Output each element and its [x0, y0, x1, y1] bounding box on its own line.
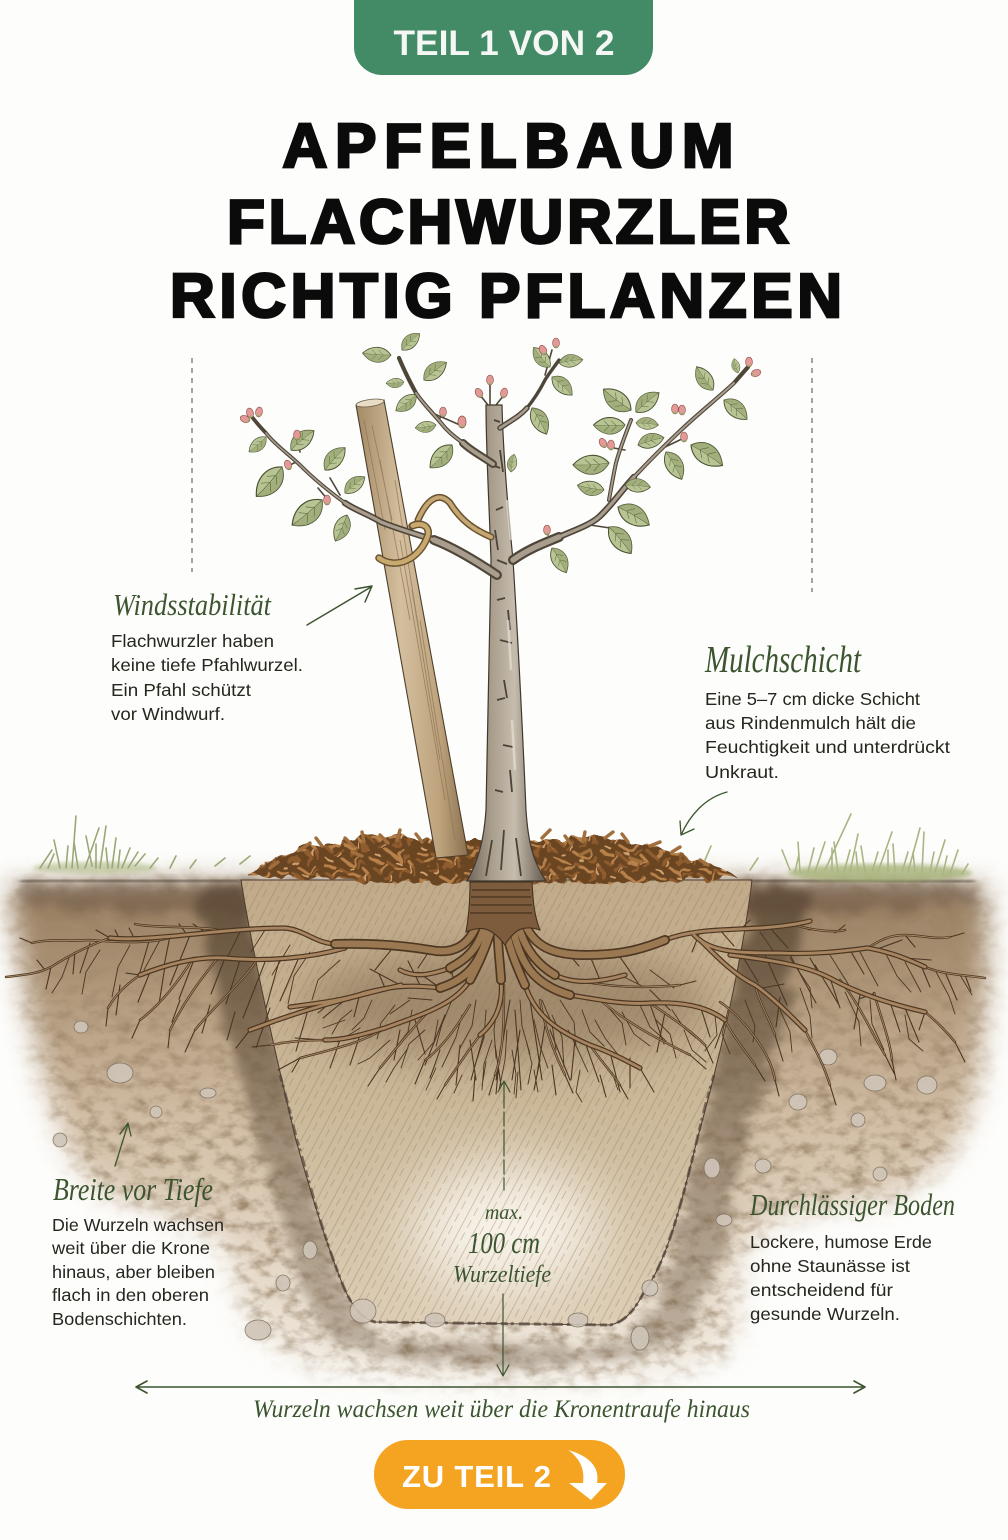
callout: Durchlässiger Boden: entscheidend für — [750, 1280, 893, 1300]
callout: Windsstabilität — [111, 587, 303, 724]
dark band around hole — [195, 888, 812, 1365]
badge: Teil 1 von 2: TEIL 1 VON 2 — [394, 24, 614, 63]
hatching — [241, 880, 752, 1325]
badge: Teil 1 von 2 — [354, 0, 653, 75]
arrow: breadth — [115, 1123, 131, 1166]
roots — [6, 882, 985, 1105]
width arrow — [136, 1381, 865, 1393]
rough hole edge — [280, 1075, 714, 1325]
grass base patches — [33, 862, 157, 874]
icon: down arrow — [568, 1450, 607, 1500]
tree trunk — [467, 405, 546, 881]
callout: Windsstabilität: vor Windwurf. — [111, 704, 225, 724]
callout: Windsstabilität: Windsstabilität — [113, 587, 272, 622]
planting hole — [241, 880, 752, 1325]
stake — [356, 398, 468, 858]
mulch mound — [248, 830, 738, 883]
rope tie — [379, 497, 491, 563]
callout: Durchlässiger Boden: gesunde Wurzeln. — [750, 1304, 900, 1324]
dark topsoil band — [20, 881, 976, 916]
callout: Mulchschicht: Feuchtigkeit und unterdrückt — [705, 737, 950, 757]
button: Zu Teil 2: ZU TEIL 2 — [402, 1459, 551, 1494]
title — [170, 112, 842, 331]
root collar — [466, 882, 540, 945]
callout: Breite vor Tiefe: flach in den oberen — [52, 1285, 209, 1305]
label: max. 100 cm Wurzeltiefe: max. — [485, 1202, 523, 1224]
callout: Windsstabilität: Flachwurzler haben — [111, 631, 274, 651]
callout: Durchlässiger Boden: ohne Staunässe ist — [750, 1256, 910, 1276]
callout: Breite vor Tiefe: Bodenschichten. — [52, 1309, 187, 1329]
grass — [33, 814, 972, 882]
surface line — [20, 880, 975, 882]
leaves — [246, 329, 753, 576]
arrow: to mulch — [680, 792, 727, 835]
tree branches — [252, 350, 748, 575]
callout: Breite vor Tiefe: weit über die Krone — [51, 1238, 210, 1258]
dashed guide lines — [192, 358, 812, 592]
label: max. 100 cm Wurzeltiefe: 100 cm — [468, 1225, 540, 1260]
title: FLACHWURZLER — [227, 188, 789, 257]
callout: Breite vor Tiefe — [51, 1171, 224, 1329]
loose chips on top — [270, 830, 708, 868]
title: APFELBAUM — [282, 112, 734, 181]
title: RICHTIG PFLANZEN — [170, 262, 842, 331]
callout: Mulchschicht: Eine 5–7 cm dicke Schicht — [705, 689, 920, 709]
stones — [53, 1021, 937, 1350]
root shadow — [300, 950, 710, 1060]
depth arrow — [497, 1081, 510, 1376]
label: max. 100 cm Wurzeltiefe — [453, 1202, 551, 1288]
soil body — [10, 882, 987, 1380]
soil cross-section — [10, 880, 987, 1380]
callout: Breite vor Tiefe: Die Wurzeln wachsen — [52, 1215, 224, 1235]
callout: Durchlässiger Boden — [749, 1187, 955, 1324]
callout: Windsstabilität: keine tiefe Pfahlwurzel. — [111, 655, 303, 675]
label: max. 100 cm Wurzeltiefe: Wurzeltiefe — [453, 1262, 551, 1288]
callout: Windsstabilität: Ein Pfahl schützt — [111, 680, 251, 700]
arrow: to stake — [307, 586, 372, 625]
callout: Mulchschicht — [704, 639, 950, 782]
callout: Mulchschicht: aus Rindenmulch hält die — [705, 713, 916, 733]
callout: Mulchschicht: Unkraut. — [705, 762, 779, 782]
button: Zu Teil 2 — [374, 1440, 625, 1509]
caption: Wurzeln wachsen weit über die Kronentraufe hinaus — [253, 1396, 750, 1423]
light glow in hole — [410, 1165, 600, 1295]
callout: Durchlässiger Boden: Lockere, humose Erde — [750, 1232, 932, 1252]
blossom buds — [239, 338, 762, 535]
callout: Breite vor Tiefe: hinaus, aber bleiben — [52, 1262, 215, 1282]
callout: Durchlässiger Boden: Durchlässiger Boden — [749, 1187, 955, 1222]
callout: Mulchschicht: Mulchschicht — [704, 639, 862, 681]
callout: Breite vor Tiefe: Breite vor Tiefe — [53, 1171, 213, 1207]
